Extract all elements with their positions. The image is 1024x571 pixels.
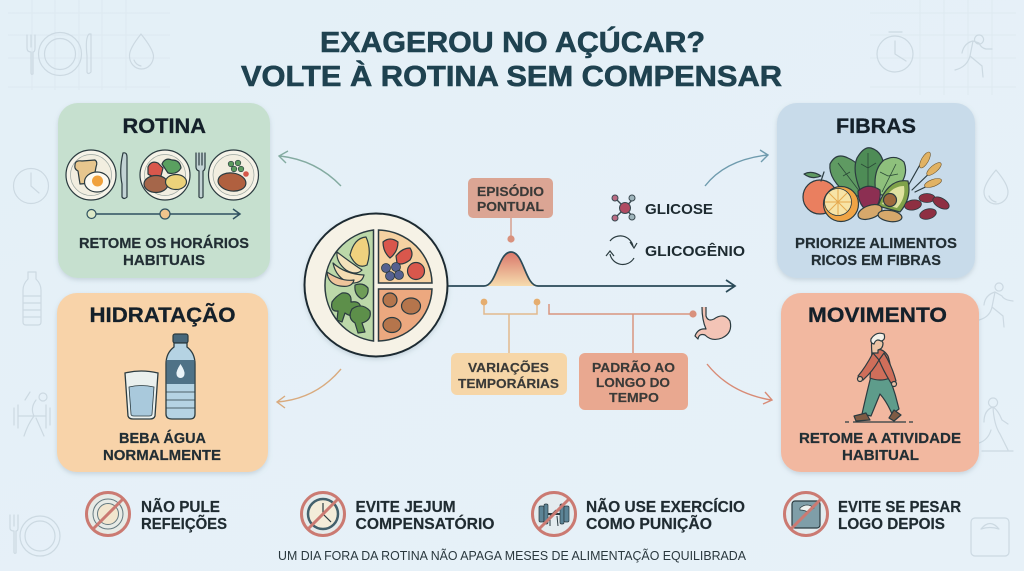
text: rotina caption: HABITUAIS (123, 253, 205, 269)
panel: fibras (777, 103, 975, 278)
callout: padrao ao longo do tempo: PADRÃO AO (592, 360, 675, 375)
title: EXAGEROU NO AÇÚCAR? (320, 25, 705, 59)
background icon: runner top right (955, 35, 992, 77)
icon: fiber foods (803, 148, 951, 223)
legend: glicose (612, 195, 713, 221)
legend: glicose: GLICOSE (645, 201, 713, 218)
do-not: evite jejum compensatorio (302, 492, 494, 536)
background icon: bottle left (23, 272, 41, 325)
icon: plate with toast and egg (66, 150, 116, 200)
background icon: walker right (979, 398, 1013, 451)
timeline: meals (87, 209, 240, 219)
callout: padrao ao longo do tempo: TEMPO (609, 390, 659, 405)
icon: plate with meat and salad (140, 150, 190, 200)
footer message: UM DIA FORA DA ROTINA NÃO APAGA MESES DE ALIMENTAÇÃO EQUILIBRADA (278, 549, 747, 563)
callout: episodio pontual (468, 178, 553, 243)
icon: water bottle (166, 334, 195, 419)
arrow: to hidratacao (277, 369, 341, 408)
background icon: runner right (979, 283, 1013, 327)
callout: padrao ao longo do tempo: LONGO DO (596, 375, 670, 390)
chart: glucose timeline (448, 252, 735, 292)
arrow: to rotina (279, 151, 341, 186)
title (241, 25, 782, 93)
icon: stomach (695, 307, 731, 339)
do-not: evite jejum compensatorio: EVITE JEJUM (356, 499, 456, 516)
background icon: dumbbell figure (14, 392, 50, 436)
callout: variacoes temporarias: VARIAÇÕES (468, 360, 549, 375)
icon: walking person (845, 333, 913, 422)
text: rotina caption (79, 235, 249, 269)
background icon: cutlery and plate (27, 32, 91, 76)
heading: rotina: ROTINA (122, 115, 206, 138)
title: VOLTE À ROTINA SEM COMPENSAR (241, 59, 782, 93)
legend: glicogenio (606, 236, 745, 264)
do-not: nao use exercicio como punicao (532, 492, 745, 536)
do-not: nao pule refeicoes (86, 492, 227, 536)
icon: knife (121, 153, 127, 198)
text: rotina caption: RETOME OS HORÁRIOS (79, 235, 249, 252)
callout: variacoes temporarias (451, 299, 567, 395)
icon: glass of water (125, 371, 158, 419)
background icon: scale (971, 518, 1009, 556)
text: fibras caption: PRIORIZE ALIMENTOS (795, 236, 957, 252)
do-not: evite se pesar (784, 492, 961, 536)
text: fibras caption (795, 236, 957, 269)
heading: hidratacao: HIDRATAÇÃO (90, 304, 236, 327)
do-not: evite se pesar: LOGO DEPOIS (838, 516, 945, 533)
background icon: stopwatch (877, 32, 913, 72)
arrow: to fibras (705, 150, 768, 186)
background icon: water drop (129, 34, 154, 69)
text: movimento caption: RETOME A ATIVIDADE (799, 431, 961, 447)
callout: episodio pontual: PONTUAL (477, 199, 544, 214)
text: movimento caption (799, 431, 961, 464)
callout: variacoes temporarias: TEMPORÁRIAS (458, 376, 559, 391)
do-not: nao use exercicio como punicao: COMO PUNIÇÃO (586, 515, 712, 533)
text: hidratacao caption (103, 430, 221, 464)
arrow: to movimento (707, 364, 772, 404)
callout: padrao ao longo do tempo (549, 304, 697, 410)
do-not: nao use exercicio como punicao: NÃO USE EXERCÍCIO (586, 498, 745, 516)
panel: movimento (781, 293, 979, 472)
text: hidratacao caption: NORMALMENTE (103, 448, 221, 464)
text: hidratacao caption: BEBA ÁGUA (119, 430, 207, 447)
icon: fork (196, 153, 205, 198)
text: movimento caption: HABITUAL (842, 448, 919, 464)
do-not: evite jejum compensatorio: COMPENSATÓRIO (356, 515, 494, 533)
heading: fibras: FIBRAS (836, 115, 916, 138)
callout: episodio pontual: EPISÓDIO (477, 184, 544, 199)
legend: glicogenio: GLICOGÊNIO (645, 242, 745, 260)
text: fibras caption: RICOS EM FIBRAS (811, 253, 941, 269)
do-not: nao pule refeicoes: REFEIÇÕES (141, 515, 227, 533)
heading: movimento: MOVIMENTO (808, 304, 947, 327)
icon: central plate (304, 214, 448, 356)
panel: rotina (58, 103, 270, 278)
background icon: drop right (984, 170, 1008, 204)
background icon: plate bottom left (10, 515, 60, 556)
do-not: nao pule refeicoes: NÃO PULE (141, 498, 220, 516)
do-not: evite se pesar: EVITE SE PESAR (838, 499, 961, 516)
panel: hidratacao (57, 293, 268, 472)
icon: plate with steak and peas (208, 150, 258, 200)
background icon: clock left (14, 168, 48, 204)
